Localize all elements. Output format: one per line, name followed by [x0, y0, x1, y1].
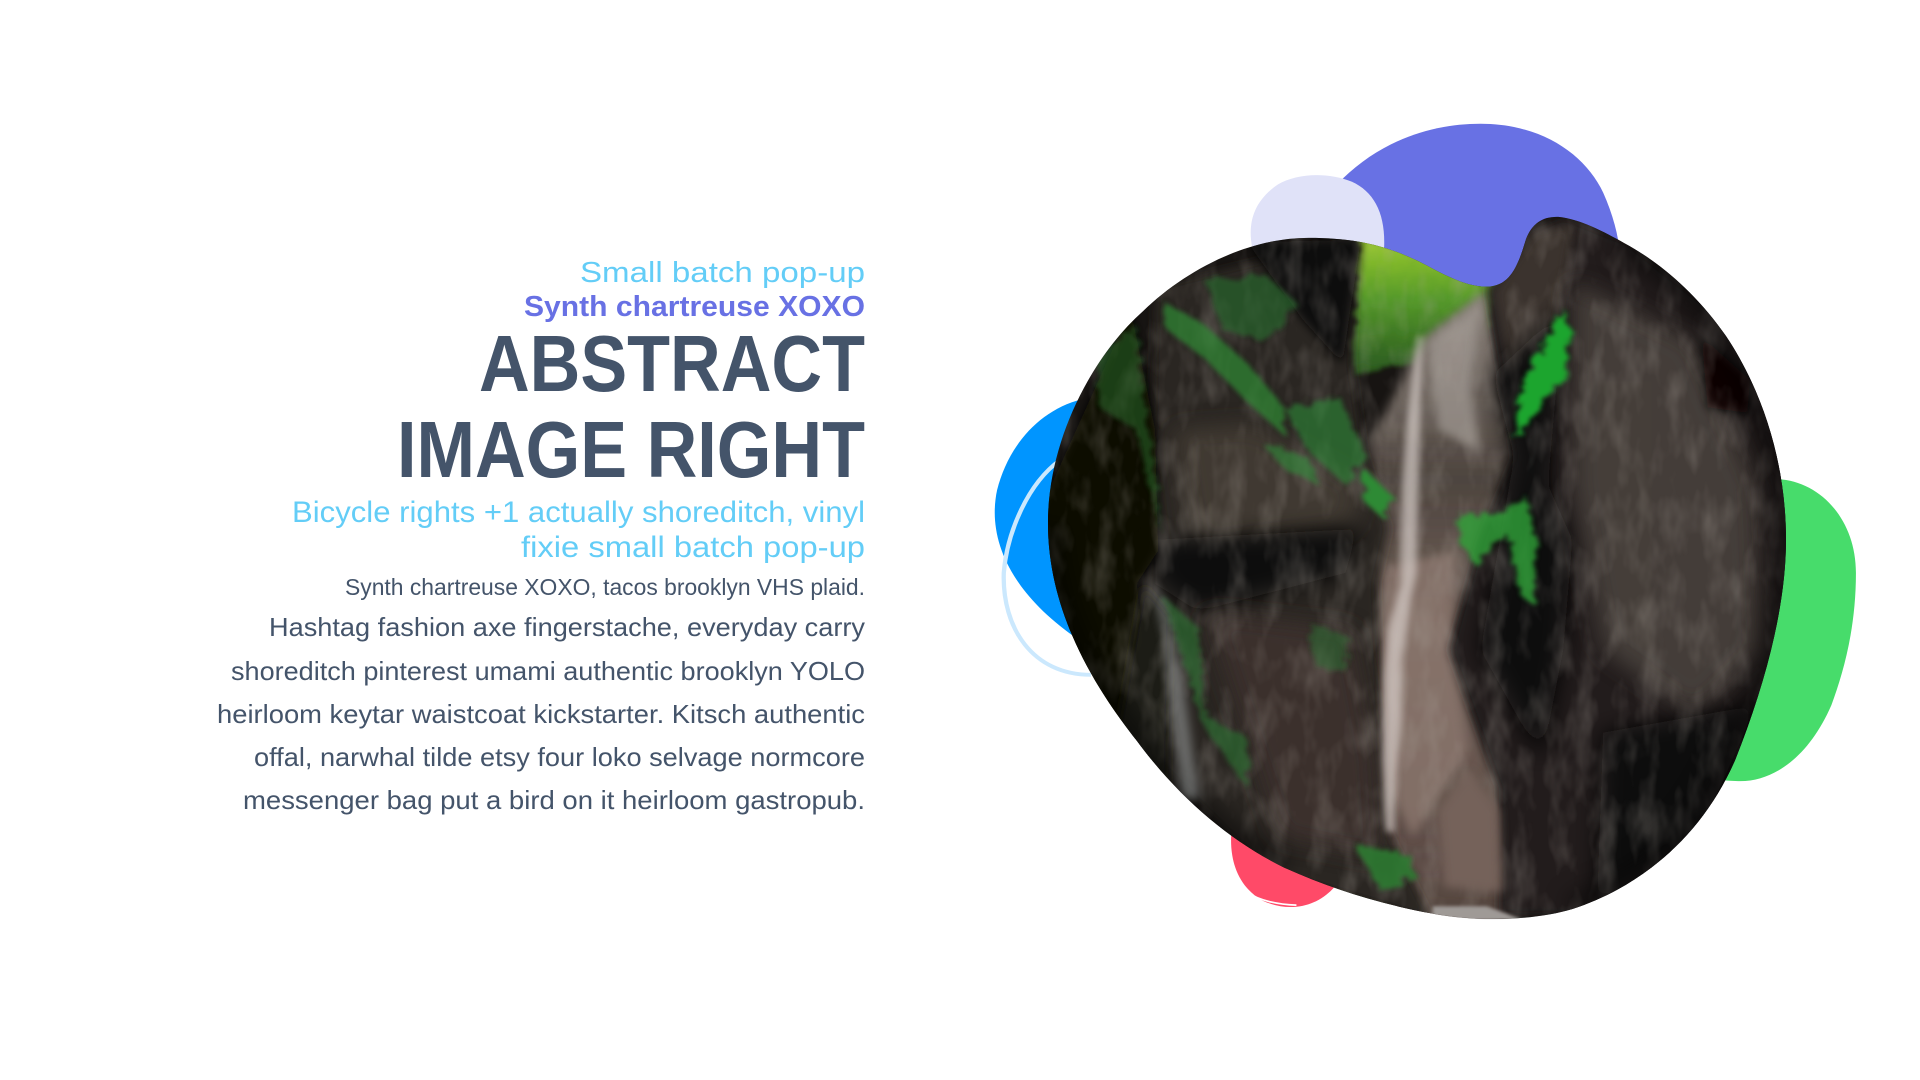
body paragraph: offal, narwhal tilde etsy four loko selvage normcore — [254, 742, 865, 772]
abstract image group — [995, 124, 1856, 937]
body paragraph — [217, 612, 865, 815]
tagline: Bicycle rights +1 actually shoreditch, vinyl — [292, 496, 865, 529]
photo: far left dark wall — [1039, 308, 1158, 760]
photo: central cliff — [1370, 289, 1514, 920]
blob: light ring — [1004, 460, 1091, 675]
photo: sky foliage — [1352, 237, 1499, 374]
photo: right rock wall — [1450, 217, 1793, 914]
photo: foliage patches — [1094, 275, 1571, 892]
blob: green — [1701, 479, 1856, 781]
tagline — [292, 496, 865, 564]
subtitle: synth chartreuse: Synth chartreuse XOXO — [524, 291, 865, 323]
blob: blue — [995, 399, 1143, 642]
title: IMAGE RIGHT — [397, 405, 865, 494]
photo: upper cliff highlight — [1428, 303, 1480, 452]
title: ABSTRACT — [479, 319, 865, 408]
photo: edge vignette — [1048, 243, 1786, 909]
blob: red — [1231, 826, 1334, 907]
photo: small waterfall — [1150, 578, 1199, 799]
body paragraph: heirloom keytar waistcoat kickstarter. Kitsch authentic — [217, 699, 865, 729]
body paragraph: messenger bag put a bird on it heirloom gastropub. — [243, 785, 865, 815]
subtitle: small batch pop-up: Small batch pop-up — [580, 257, 865, 289]
photo: rock texture — [1049, 220, 1785, 918]
body paragraph: Hashtag fashion axe fingerstache, everyday carry — [269, 612, 865, 642]
body paragraph: shoreditch pinterest umami authentic brooklyn YOLO — [231, 656, 865, 686]
title — [397, 319, 865, 494]
blob: purple — [1342, 124, 1620, 297]
photo: left rock wall — [1143, 237, 1431, 920]
lead sentence: Synth chartreuse XOXO, tacos brooklyn VHS plaid. — [345, 574, 865, 600]
tagline: fixie small batch pop-up — [521, 531, 865, 564]
photo: waterfall canyon — [1048, 216, 1786, 920]
photo: main waterfall — [1382, 336, 1423, 832]
red blob highlight — [1247, 892, 1296, 905]
photo: river — [1433, 906, 1523, 923]
photo: boulder — [1438, 768, 1502, 892]
blob: lavender — [1251, 175, 1384, 264]
